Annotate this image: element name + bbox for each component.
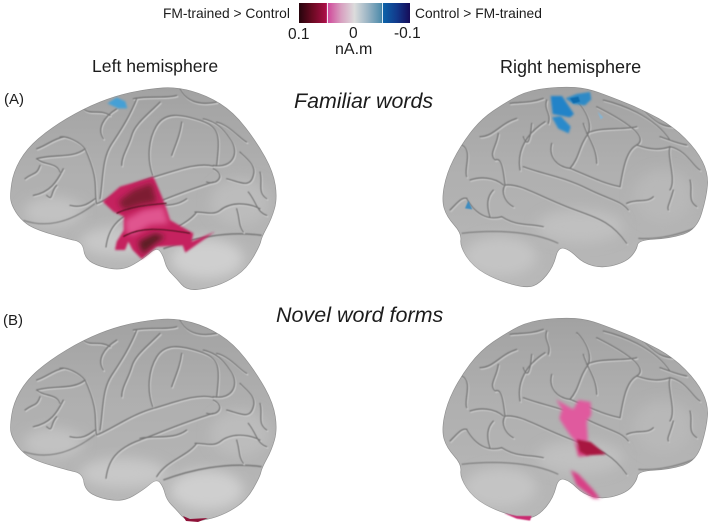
brain: familiar words, left hemisphere [11, 88, 276, 290]
colorbar unit: nA.m [335, 41, 372, 58]
heatmap: left temporal activation [103, 97, 215, 259]
heading: right hemisphere: Right hemisphere [500, 57, 641, 77]
colorbar value -0.1: -0.1 [394, 25, 421, 42]
brain: familiar words, right hemisphere [443, 87, 708, 287]
brain: novel word forms, right hemisphere [443, 318, 708, 521]
heatmap: left parietal blue spot [107, 97, 127, 108]
legend label: Control > FM-trained: Control > FM-trained [415, 6, 542, 21]
label (A): (A) [4, 91, 24, 108]
colorbar legend [163, 3, 542, 58]
heatmap: left cerebellum edge [183, 516, 208, 522]
colorbar value 0.1: 0.1 [288, 26, 310, 43]
colorbar [299, 3, 410, 23]
colorbar value 0: 0 [349, 25, 358, 42]
heatmap: right temporal activation [504, 399, 606, 521]
heatmap: right occipital blue spot [465, 201, 472, 209]
label (B): (B) [3, 312, 23, 329]
heading: familiar words: Familiar words [294, 89, 433, 113]
brain: novel word forms, left hemisphere [11, 319, 276, 522]
heatmap: right central blue patches [465, 92, 603, 209]
heading: left hemisphere: Left hemisphere [92, 56, 218, 76]
legend label: FM-trained > Control: FM-trained > Control [163, 6, 290, 21]
heading: novel word forms: Novel word forms [276, 303, 444, 327]
